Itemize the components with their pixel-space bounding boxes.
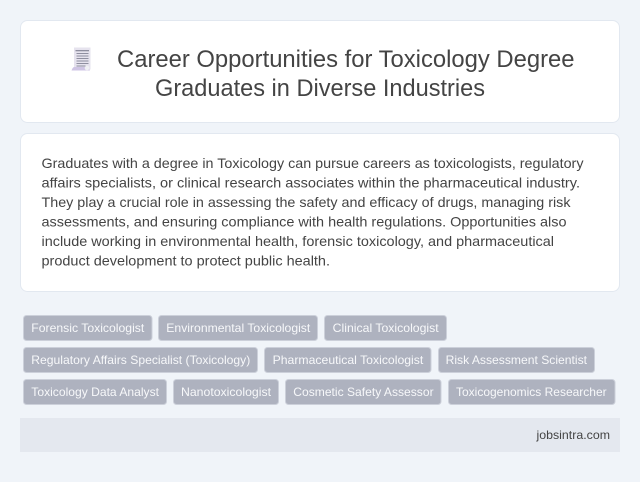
tag: Pharmaceutical Toxicologist: Pharmaceutical Toxicologist <box>273 353 424 367</box>
footer <box>20 418 620 452</box>
tag: Environmental Toxicologist: Environmental Toxicologist <box>166 321 311 335</box>
description text: assessments, and ensuring compliance with health regulations. Opportunities also <box>42 214 567 230</box>
panel: description <box>20 134 620 292</box>
description text: Graduates with a degree in Toxicology can pursue careers as toxicologists, regulatory <box>42 155 584 171</box>
tag: Regulatory Affairs Specialist: Regulatory Affairs Specialist (Toxicology) <box>31 353 250 367</box>
tag: Cosmetic Safety Assessor: Cosmetic Safety Assessor <box>293 385 434 399</box>
tag: Toxicogenomics Researcher <box>448 380 615 404</box>
tag: Toxicogenomics Researcher: Toxicogenomics Researcher <box>456 385 607 399</box>
tag list: job titles <box>24 316 615 404</box>
tag: Cosmetic Safety Assessor <box>286 380 441 404</box>
tag: Environmental Toxicologist <box>158 316 318 340</box>
tag: Nanotoxicologist: Nanotoxicologist <box>181 385 272 399</box>
description text: include working in environmental health, forensic toxicology, and pharmaceutical <box>42 233 554 249</box>
tag: Nanotoxicologist <box>174 380 278 404</box>
tag: Clinical Toxicologist: Clinical Toxicologist <box>333 321 439 335</box>
title: Career Opportunities for Toxicology Degree <box>117 46 574 73</box>
tag: Forensic Toxicologist: Forensic Toxicologist <box>31 321 145 335</box>
tag: Risk Assessment Scientist: Risk Assessment Scientist <box>446 353 588 367</box>
description text: affairs specialists, or clinical research associates within the pharmaceutical industry. <box>42 174 580 190</box>
tag: Forensic Toxicologist <box>24 316 152 340</box>
tag: Clinical Toxicologist <box>324 316 446 340</box>
tag: Regulatory Affairs Specialist <box>24 348 258 372</box>
description text: product development to protect public health. <box>42 252 330 268</box>
tag: Risk Assessment Scientist <box>438 348 594 372</box>
description text <box>42 155 584 268</box>
tag: Toxicology Data Analyst: Toxicology Data Analyst <box>31 385 160 399</box>
title: Graduates in Diverse Industries <box>155 75 485 102</box>
description text: They play a crucial role in assessing the safety and efficacy of drugs, managing risk <box>42 194 572 210</box>
tag: Pharmaceutical Toxicologist <box>264 348 431 372</box>
icon: paper scroll <box>72 48 90 70</box>
panel: header <box>20 20 620 122</box>
footer source text: jobsintra.com <box>535 428 610 442</box>
title <box>117 46 574 102</box>
tag: Toxicology Data Analyst <box>24 380 166 404</box>
